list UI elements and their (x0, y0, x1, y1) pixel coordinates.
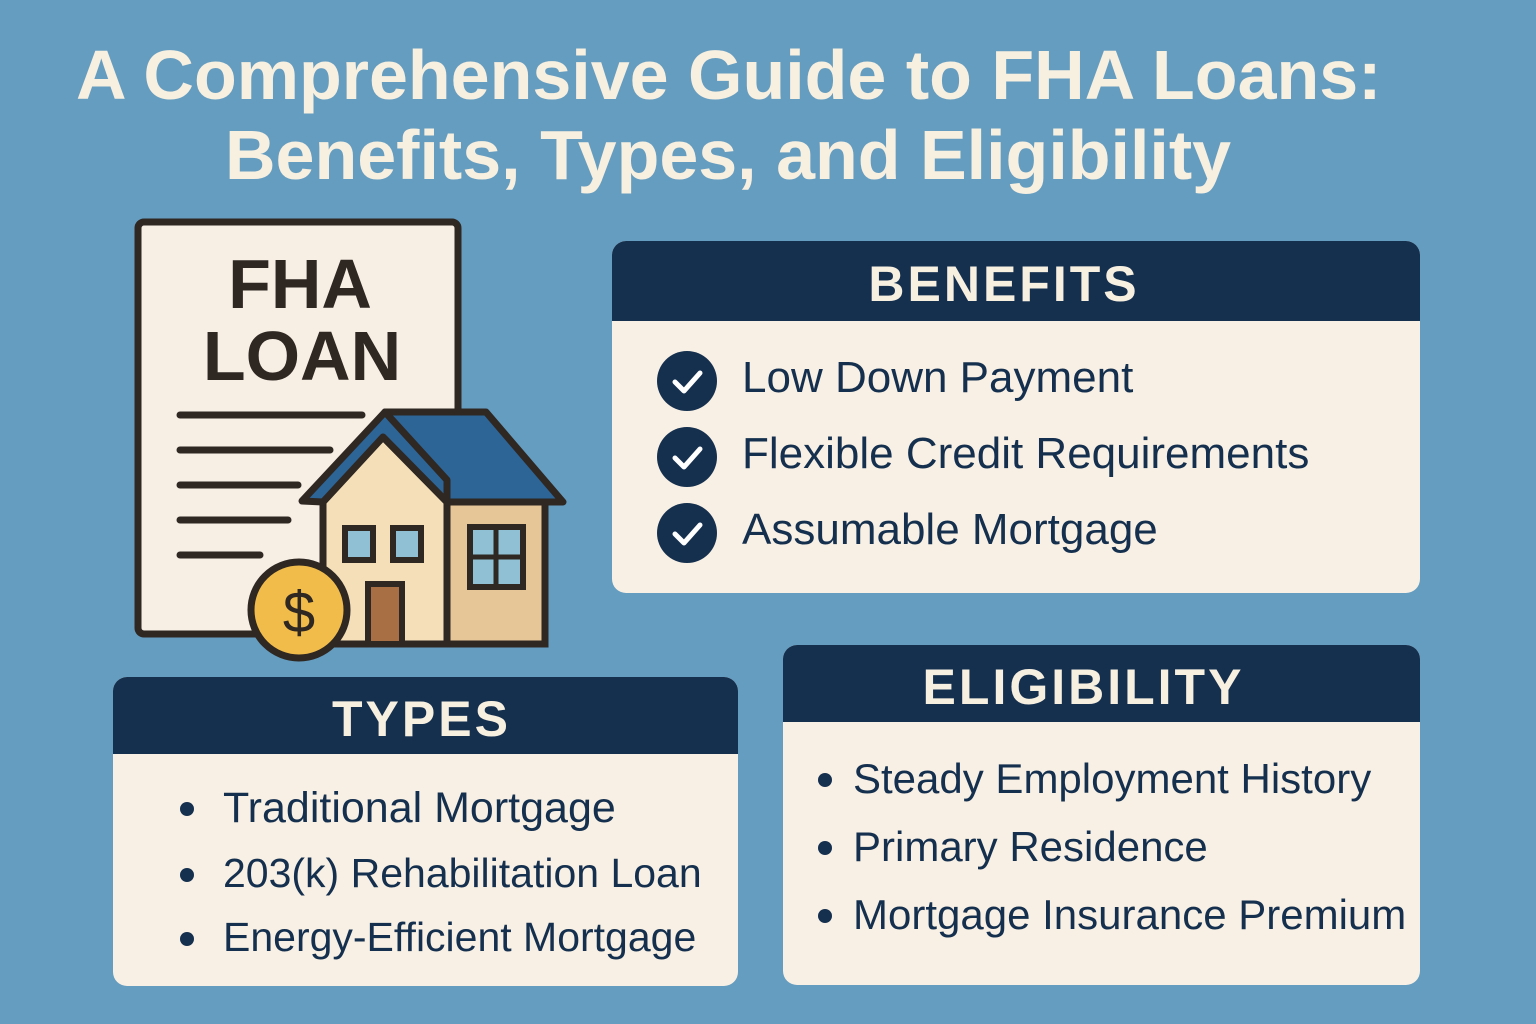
eligibility items: Primary Residence (853, 823, 1208, 870)
eligibility items (818, 755, 1406, 938)
benefit items: Flexible Credit Requirements (742, 429, 1309, 478)
benefit items: Low Down Payment (742, 353, 1133, 402)
benefit items (657, 351, 1309, 563)
title: Benefits, Types, and Eligibility (225, 116, 1231, 194)
panel: eligibility (783, 645, 1420, 985)
icon: FHA loan document with house and coin: FHA (228, 245, 372, 323)
type items: Traditional Mortgage (223, 784, 616, 832)
benefit items: Assumable Mortgage (742, 505, 1158, 554)
type items (180, 784, 702, 960)
panel: benefits (612, 241, 1420, 593)
eligibility items: Mortgage Insurance Premium (853, 891, 1406, 938)
icon: FHA loan document with house and coin: $ (283, 580, 315, 645)
heading: benefits (612, 241, 1420, 321)
icon: FHA loan document with house and coin (134, 218, 566, 662)
heading: types: TYPES (332, 691, 511, 747)
panel: types (113, 677, 738, 986)
type items: Energy-Efficient Mortgage (223, 914, 696, 960)
eligibility items: Steady Employment History (853, 755, 1371, 802)
title: A Comprehensive Guide to FHA Loans: (76, 36, 1382, 114)
icon: FHA loan document with house and coin: LOAN (203, 317, 401, 395)
type items: 203(k) Rehabilitation Loan (223, 850, 702, 896)
heading: benefits: BENEFITS (868, 256, 1140, 312)
heading: eligibility: ELIGIBILITY (923, 659, 1244, 715)
title (76, 36, 1382, 194)
heading: types (113, 677, 738, 754)
heading: eligibility (783, 645, 1420, 722)
